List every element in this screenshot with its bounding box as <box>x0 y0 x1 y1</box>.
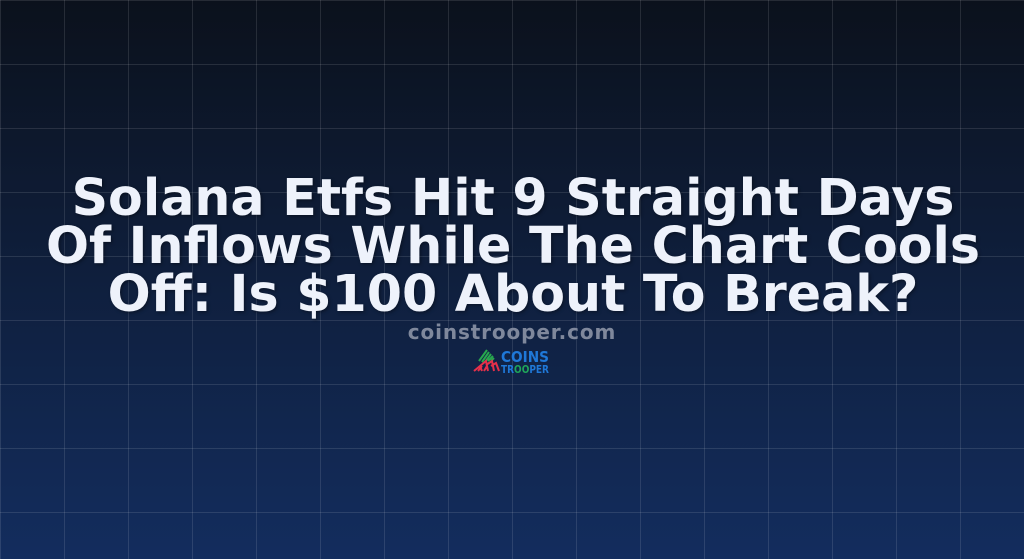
title: Off: Is $100 About To Break? <box>108 264 918 323</box>
icon: coinstrooper logo <box>473 348 549 374</box>
website url: coinstrooper.com <box>408 320 616 344</box>
title <box>46 168 980 323</box>
title: Solana Etfs Hit 9 Straight Days <box>72 168 954 227</box>
logo mark: green and red hatched peaks <box>474 350 499 371</box>
title: Of Inflows While The Chart Cools <box>46 216 980 275</box>
